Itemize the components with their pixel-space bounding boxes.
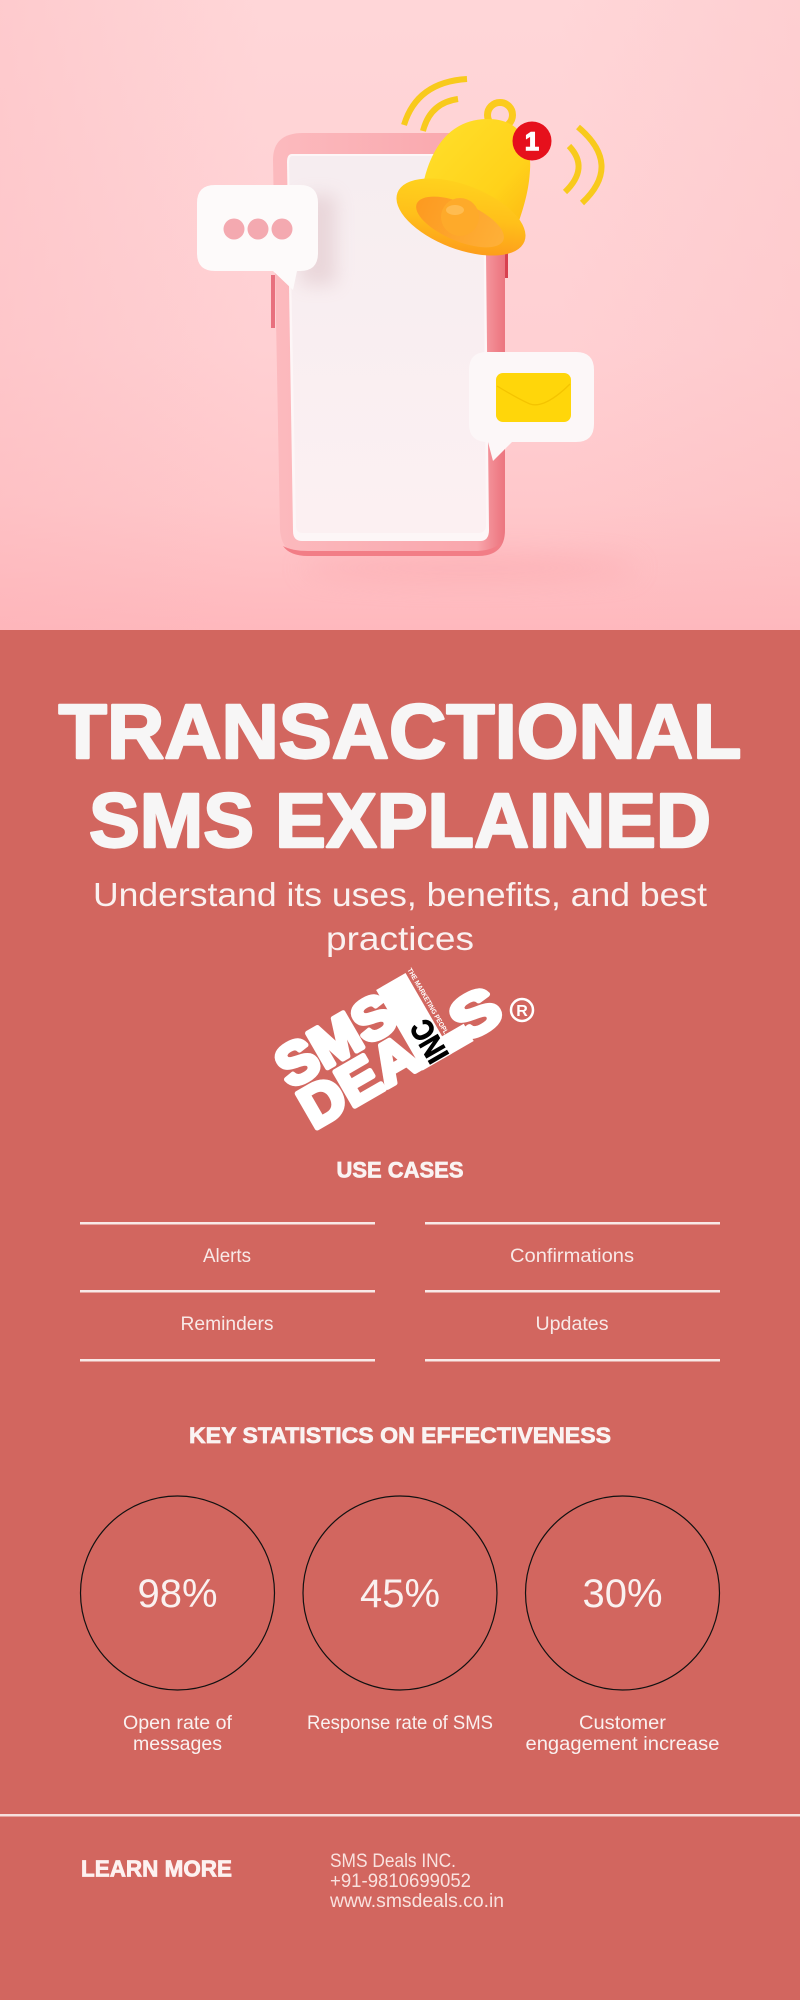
stat: 30%: 30% <box>582 1572 662 1616</box>
logo: SMS Deals Inc: S <box>438 974 512 1054</box>
logo: SMS Deals Inc: INC <box>403 1013 456 1069</box>
contact details: www.smsdeals.co.in <box>329 1891 504 1912</box>
icon: sound waves <box>404 79 602 203</box>
stat: 45%: 45% <box>360 1572 440 1616</box>
learn more: LEARN MORE <box>81 1856 232 1882</box>
use cases table: Confirmations <box>510 1246 634 1267</box>
logo registered mark <box>511 999 533 1021</box>
subtitle: Understand its uses, benefits, and best <box>93 876 707 913</box>
subtitle <box>93 876 707 957</box>
stat: 30%: engagement increase <box>526 1734 720 1755</box>
hero illustration panel <box>0 0 800 630</box>
icon: message bubble with envelope <box>469 352 594 461</box>
logo registered mark: R <box>516 1003 528 1020</box>
stat: 45% <box>303 1496 497 1734</box>
contact details: +91-9810699052 <box>330 1871 471 1892</box>
stat: 98%: 98% <box>138 1572 218 1616</box>
heading: key statistics: KEY STATISTICS ON EFFECTIVENESS <box>189 1423 611 1448</box>
logo: SMS Deals Inc: SMS <box>264 981 407 1100</box>
icon: smartphone <box>271 133 508 556</box>
stat: 30% <box>526 1496 720 1755</box>
logo: SMS Deals Inc: THE MARKETING PEOPLE <box>405 967 451 1039</box>
use cases table <box>80 1222 720 1362</box>
contact details <box>329 1851 504 1912</box>
subtitle: practices <box>326 920 474 957</box>
stat: 98%: Open rate of <box>123 1713 233 1734</box>
heading: use cases: USE CASES <box>336 1158 464 1182</box>
icon: chat bubble with dots <box>197 185 336 290</box>
title: TRANSACTIONAL <box>58 689 742 775</box>
icon: red notification badge: 1 <box>525 128 539 156</box>
title <box>58 689 742 864</box>
logo: SMS Deals Inc: DEA <box>288 1021 430 1141</box>
icon: red notification badge <box>512 122 552 160</box>
logo: SMS Deals Inc <box>264 933 512 1141</box>
stat: 98% <box>80 1496 274 1755</box>
use cases table: Alerts <box>203 1246 251 1267</box>
title: SMS EXPLAINED <box>89 778 711 864</box>
contact details: SMS Deals INC. <box>330 1851 456 1872</box>
icon: yellow bell <box>386 102 536 271</box>
stat: 45%: Response rate of SMS <box>307 1713 493 1734</box>
stat: 98%: messages <box>133 1734 222 1755</box>
use cases table: Updates <box>536 1314 608 1335</box>
stat: 30%: Customer <box>579 1713 667 1734</box>
use cases table: Reminders <box>180 1314 274 1335</box>
